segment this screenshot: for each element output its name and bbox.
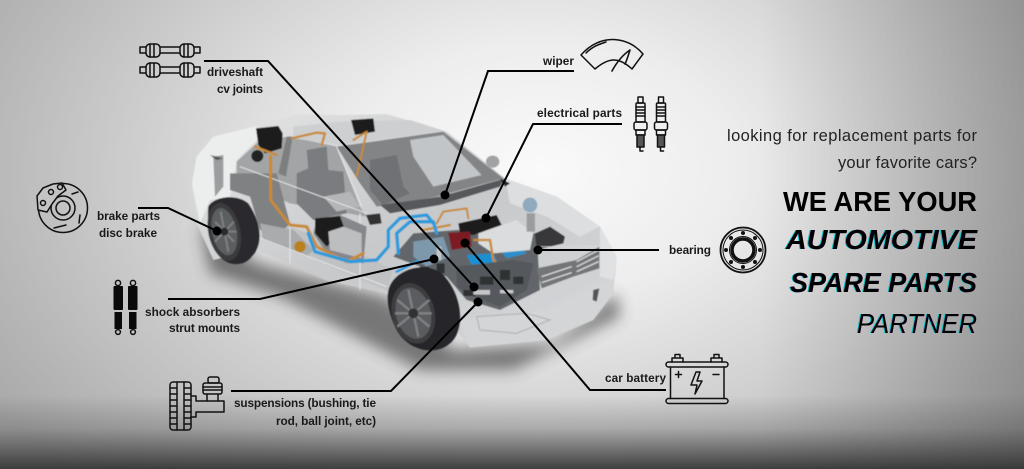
label: wiper: wiper bbox=[542, 54, 574, 68]
rear wheel bbox=[203, 197, 260, 264]
callout line: bearing bbox=[534, 246, 659, 254]
tagline bbox=[727, 127, 978, 172]
callout line: wiper bbox=[440, 71, 574, 200]
engine details bbox=[458, 215, 502, 235]
label: driveshaft cv joints: cv joints bbox=[217, 82, 263, 96]
icon: ball bearing bbox=[720, 228, 766, 272]
label: bearing: bearing bbox=[669, 243, 711, 257]
tagline: looking for replacement parts for bbox=[727, 127, 978, 145]
icon: spark plugs bbox=[634, 97, 668, 151]
label: brake parts disc brake: disc brake bbox=[99, 226, 157, 240]
label: shock absorbers strut mounts: strut mounts bbox=[169, 321, 240, 335]
icon: brake disc bbox=[37, 183, 88, 232]
label: brake parts disc brake: brake parts bbox=[97, 209, 160, 223]
rear structure bbox=[230, 173, 290, 233]
car cutaway illustration bbox=[192, 114, 620, 370]
label: electrical parts: electrical parts bbox=[537, 106, 622, 120]
callout line: brake parts bbox=[138, 208, 222, 236]
label: driveshaft cv joints bbox=[207, 65, 263, 96]
mirror and rear motors bbox=[486, 156, 499, 168]
callout line: suspensions bbox=[231, 298, 482, 391]
headline: WE ARE YOUR bbox=[783, 186, 977, 217]
headline: PARTNER bbox=[857, 308, 977, 339]
label: suspensions bbox=[234, 396, 376, 428]
front seats bbox=[297, 147, 347, 220]
label: driveshaft cv joints: driveshaft bbox=[207, 65, 263, 79]
callout line: car battery bbox=[460, 238, 666, 390]
car body shell bbox=[192, 114, 617, 350]
headline: AUTOMOTIVE bbox=[785, 224, 978, 255]
windshield and cabin glass bbox=[337, 132, 503, 207]
headline: SPARE PARTS bbox=[790, 267, 977, 298]
floor battery module bbox=[313, 215, 367, 263]
label: suspensions: rod, ball joint, etc) bbox=[276, 414, 376, 428]
icon: suspension wheel and coil bbox=[170, 377, 224, 430]
orange coolant pipes bbox=[255, 132, 468, 262]
icon: windshield wiper bbox=[581, 39, 643, 71]
callout line: electrical parts bbox=[482, 124, 622, 222]
label: suspensions: suspensions (bushing, tie bbox=[234, 396, 376, 410]
icon: shock absorbers bbox=[114, 280, 138, 334]
grille and front bumper bbox=[537, 247, 599, 288]
callout line: driveshaft bbox=[204, 61, 478, 292]
car ground shadow bbox=[200, 223, 620, 370]
blue coolant pipes bbox=[308, 215, 447, 272]
headline bbox=[783, 186, 978, 339]
label: shock absorbers strut mounts: shock absorbers bbox=[145, 305, 240, 319]
engine bay base bbox=[393, 230, 540, 310]
door frame lines bbox=[240, 147, 387, 290]
label: car battery: car battery bbox=[605, 371, 666, 385]
tagline: your favorite cars? bbox=[838, 154, 977, 172]
callout line: shock absorbers bbox=[168, 254, 438, 299]
icon: driveshaft and cv joints bbox=[140, 44, 200, 77]
label: brake parts disc brake bbox=[97, 209, 160, 240]
icon: car battery bbox=[666, 354, 728, 404]
front wheel bbox=[385, 267, 460, 350]
label: shock absorbers strut mounts bbox=[145, 305, 240, 335]
